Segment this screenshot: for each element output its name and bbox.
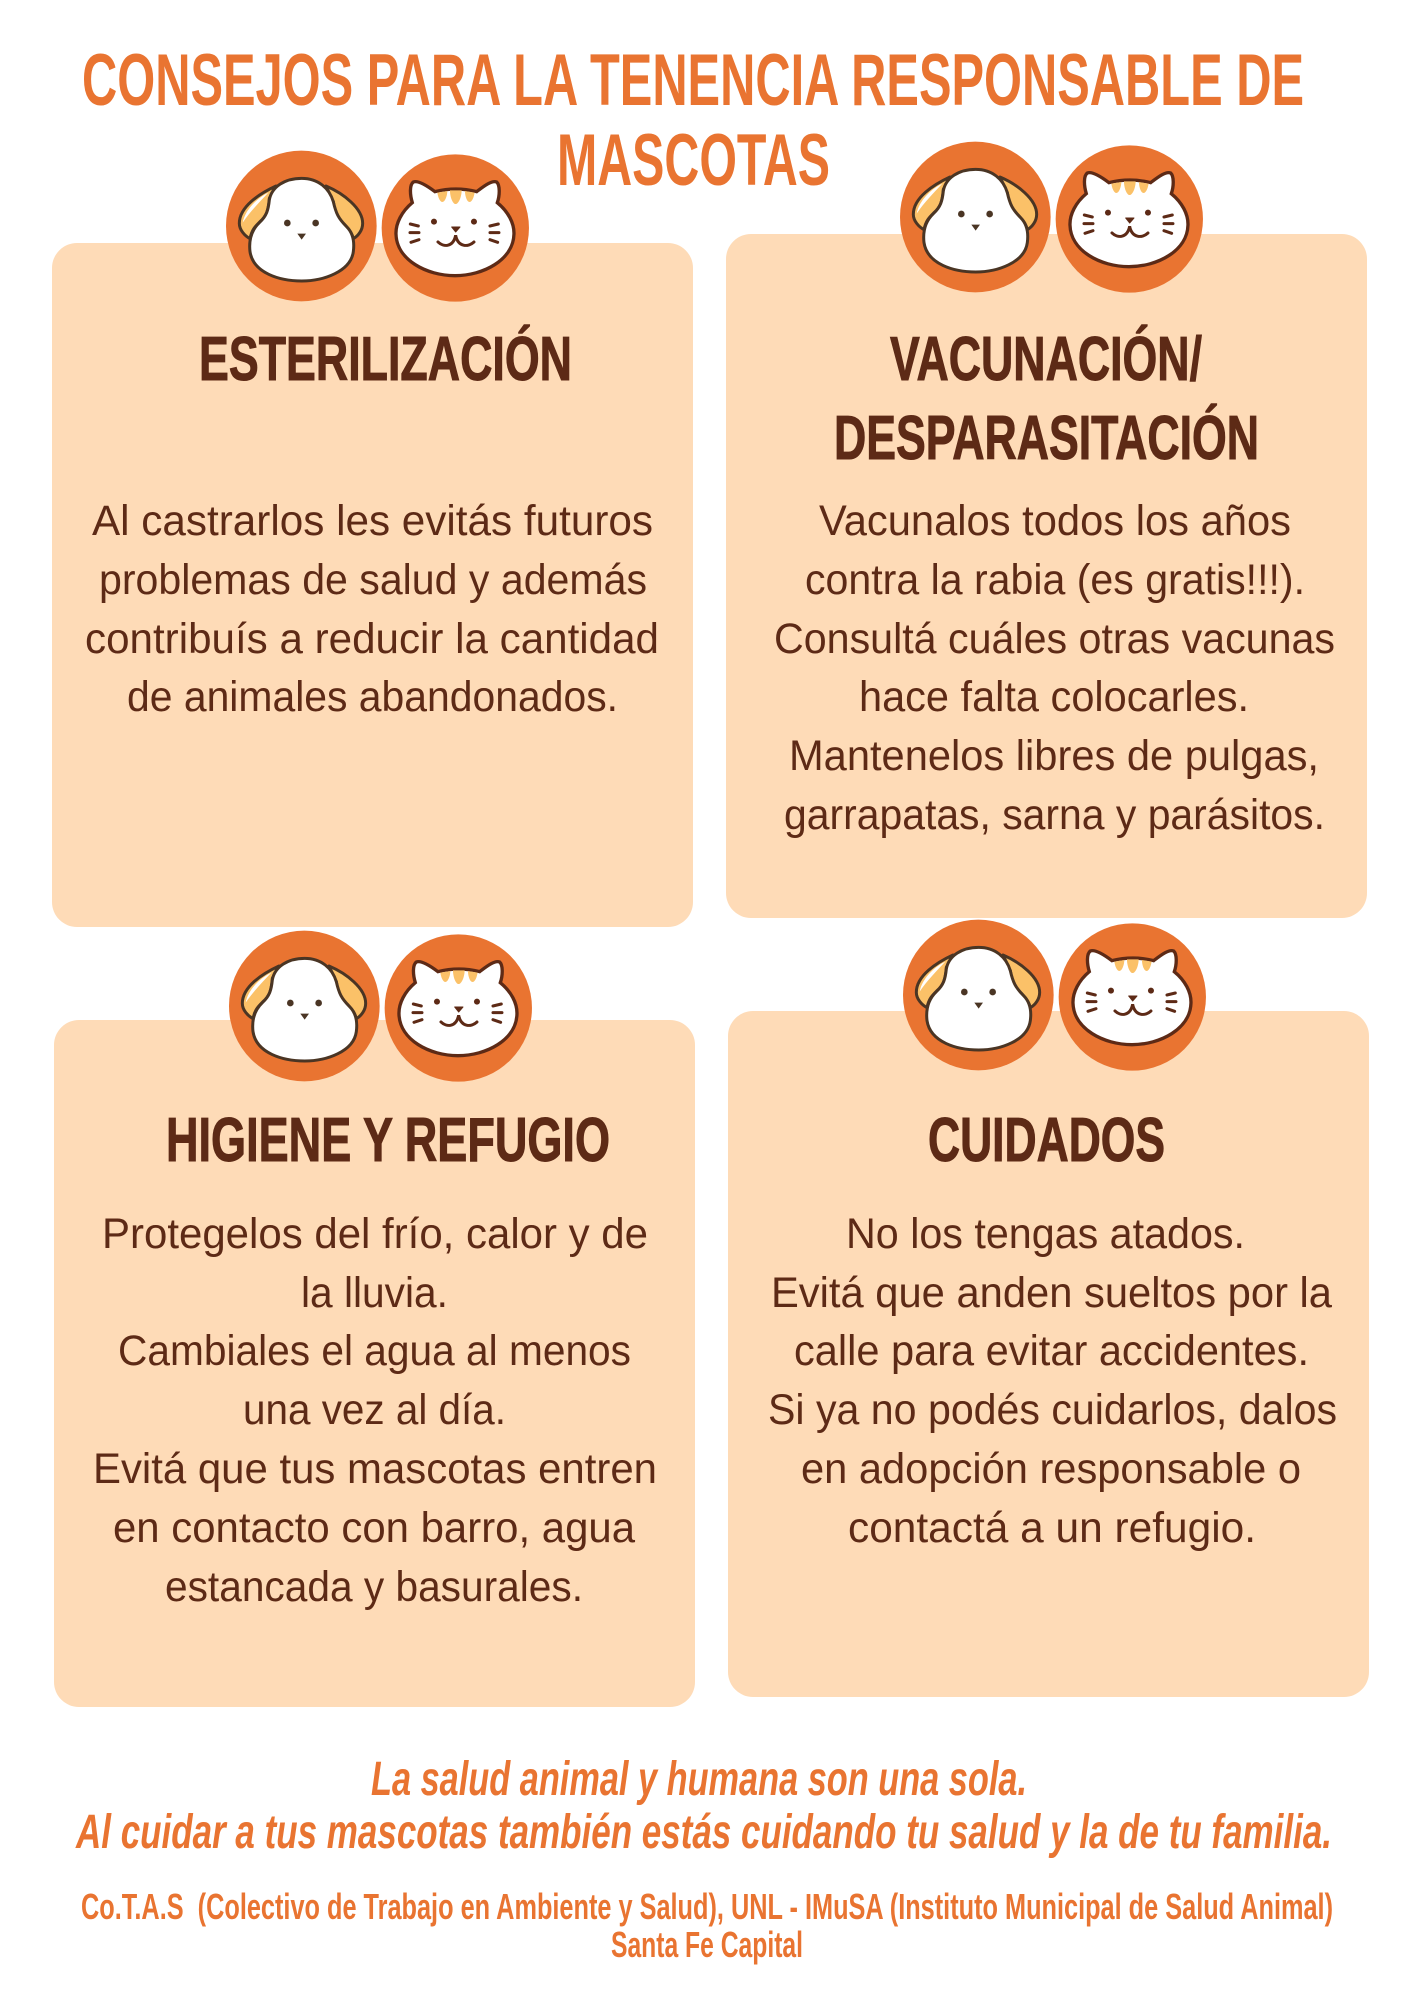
- slogan: [75, 1753, 1332, 1859]
- body text: contactá a un refugio.: [848, 1504, 1256, 1552]
- card background: [54, 1020, 695, 1707]
- credits: Santa Fe Capital: [611, 1924, 803, 1965]
- slogan: La salud animal y humana son una sola.: [371, 1753, 1027, 1806]
- icon: dog: [226, 151, 377, 301]
- panel: cuidados: [728, 920, 1369, 1697]
- body text: hace falta colocarles.: [859, 673, 1249, 721]
- heading: DESPARASITACIÓN: [834, 404, 1259, 473]
- body text: problemas de salud y además: [99, 556, 647, 604]
- body text: contribuís a reducir la cantidad: [85, 615, 659, 663]
- panel: vacunación: [726, 142, 1367, 918]
- credits: [81, 1886, 1333, 1965]
- body text: de animales abandonados.: [127, 673, 618, 721]
- body text: Protegelos del frío, calor y de: [102, 1210, 648, 1258]
- body text: [768, 1210, 1337, 1552]
- body text: una vez al día.: [243, 1386, 506, 1434]
- body text: la lluvia.: [301, 1269, 448, 1317]
- icon: dog: [900, 142, 1051, 292]
- body text: [774, 497, 1335, 839]
- heading: VACUNACIÓN/: [890, 325, 1202, 394]
- icon: dog: [903, 920, 1054, 1070]
- heading: CUIDADOS: [928, 1106, 1165, 1175]
- panel: higiene y refugio: [54, 931, 695, 1707]
- card background: [728, 1011, 1369, 1697]
- body text: calle para evitar accidentes.: [794, 1327, 1309, 1375]
- body text: estancada y basurales.: [165, 1563, 583, 1611]
- body text: Cambiales el agua al menos: [118, 1327, 631, 1375]
- icon: cat: [385, 934, 532, 1082]
- body text: No los tengas atados.: [846, 1210, 1245, 1258]
- panel: esterilización: [52, 151, 693, 927]
- body text: Consultá cuáles otras vacunas: [774, 615, 1335, 663]
- body text: en contacto con barro, agua: [113, 1504, 635, 1552]
- icon: cat: [1056, 145, 1203, 293]
- body text: Si ya no podés cuidarlos, dalos: [768, 1386, 1337, 1434]
- title: [82, 40, 1304, 201]
- body text: Mantenelos libres de pulgas,: [789, 732, 1319, 780]
- body text: Evitá que tus mascotas entren: [93, 1445, 657, 1493]
- body text: [85, 497, 659, 721]
- icon: cat: [382, 154, 529, 302]
- title: MASCOTAS: [557, 120, 830, 201]
- card background: [726, 234, 1367, 918]
- icon: dog: [229, 931, 380, 1081]
- body text: Al castrarlos les evitás futuros: [92, 497, 653, 545]
- body text: garrapatas, sarna y parásitos.: [784, 791, 1325, 839]
- body text: Evitá que anden sueltos por la: [771, 1269, 1332, 1317]
- card background: [52, 243, 693, 927]
- body text: [93, 1210, 657, 1611]
- body text: contra la rabia (es gratis!!!).: [805, 556, 1305, 604]
- body text: Vacunalos todos los años: [819, 497, 1291, 545]
- body text: en adopción responsable o: [801, 1445, 1301, 1493]
- heading: HIGIENE Y REFUGIO: [166, 1106, 610, 1175]
- heading: [834, 325, 1259, 473]
- heading: ESTERILIZACIÓN: [199, 325, 572, 394]
- icon: cat: [1059, 923, 1206, 1071]
